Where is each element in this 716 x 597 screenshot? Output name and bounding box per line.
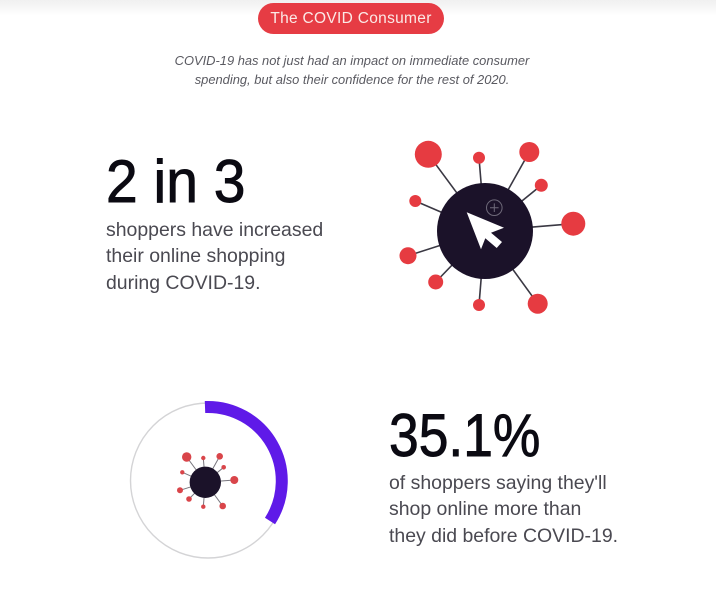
intro text xyxy=(175,53,530,87)
statistic description: shopping intentions: they did before COVID-19. xyxy=(389,525,618,547)
statistic description: online shopping: during COVID-19. xyxy=(106,272,260,294)
statistic: 35.1%: 35.1% xyxy=(388,402,540,469)
statistic description: online shopping: shoppers have increased xyxy=(106,218,323,240)
statistic description: shopping intentions: shop online more than xyxy=(389,498,581,520)
statistic description: online shopping: their online shopping xyxy=(106,245,285,267)
title pill xyxy=(258,3,444,34)
statistic description: shopping intentions: of shoppers saying they'll xyxy=(389,472,607,494)
statistic: 2 in 3: 2 in 3 xyxy=(106,148,245,215)
intro text: COVID-19 has not just had an impact on immediate consumer xyxy=(175,53,529,68)
statistic description: online shopping xyxy=(106,218,323,294)
intro text: spending, but also their confidence for the rest of 2020. xyxy=(195,72,509,87)
title pill: The COVID Consumer xyxy=(270,10,432,27)
statistic description: shopping intentions xyxy=(389,472,618,547)
